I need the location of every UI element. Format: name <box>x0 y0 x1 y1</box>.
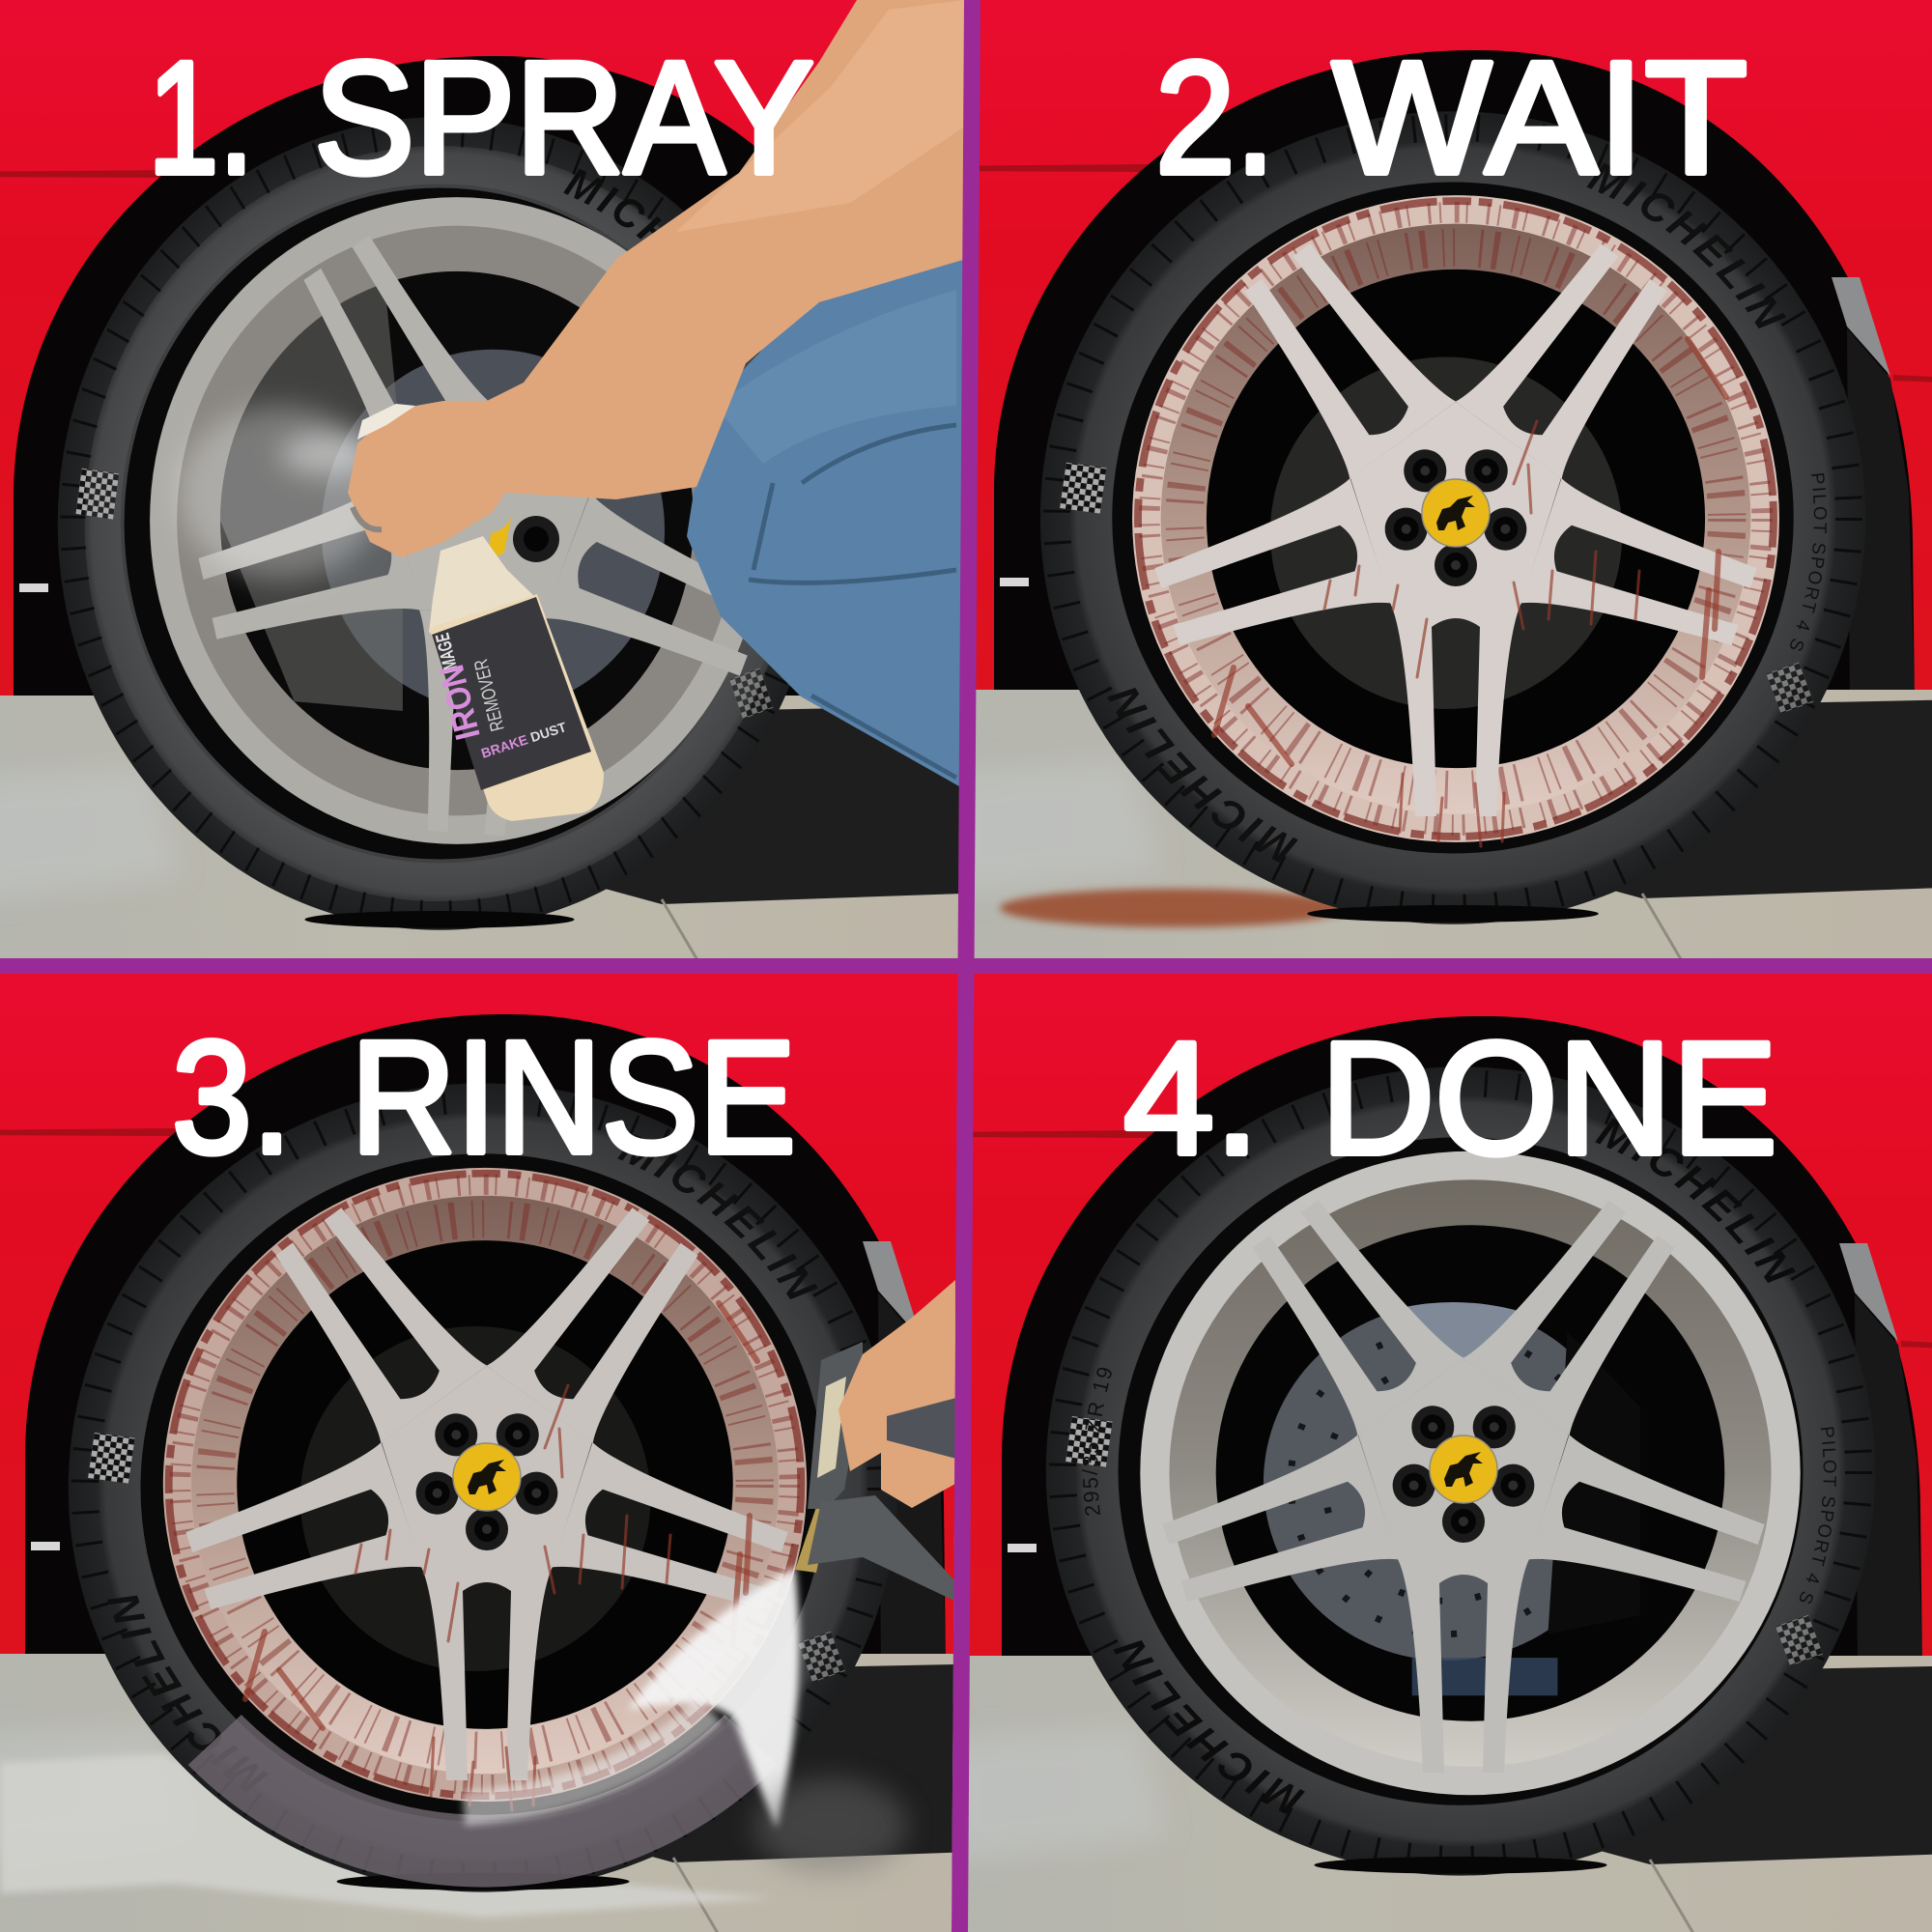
wheel: rust-stained rim <box>1132 195 1779 842</box>
wheel: foam-covered spokes <box>199 240 748 815</box>
car and ground background <box>0 0 990 995</box>
car and ground background <box>935 956 1932 1932</box>
car and ground background <box>0 954 1002 1932</box>
title: 3. RINSE: 3. <box>172 1009 292 1187</box>
wheel: rust-stained rim <box>163 1168 807 1802</box>
title: 2. WAIT <box>1155 29 1747 208</box>
product bottle: BRAKE DUST <box>479 719 569 761</box>
panel: step 1 spray <box>0 0 964 958</box>
title: 4. DONE: 4. <box>1123 1009 1260 1188</box>
yellow wheel badge peek <box>489 514 512 555</box>
product bottle: REMOVER <box>470 657 509 733</box>
pressure washer gun and hand <box>795 1280 956 1602</box>
bottle trigger head <box>357 404 415 440</box>
wheel: tire: 295/35 ZR 19 <box>1082 1368 1112 1516</box>
wheel: tire with wet sidewall: MICHELIN <box>563 168 662 240</box>
wheel: clean spokes with hub and badge <box>1154 1185 1773 1773</box>
title: 4. DONE: DONE <box>1321 1009 1777 1188</box>
title: 1. SPRAY: SPRAY <box>314 29 814 208</box>
wheel: foam-covered rim <box>150 197 764 844</box>
water jet <box>464 1567 908 1874</box>
wheel: tire <box>1040 111 1862 924</box>
wheel: tire: MICHELIN <box>1113 1640 1305 1814</box>
soapy runoff on ground <box>0 1753 773 1918</box>
bottle label text: IMAGE <box>432 631 463 675</box>
panel: step 2 wait <box>974 0 1932 958</box>
wheel: tire: PILOT SPORT 4 S <box>1800 1427 1836 1604</box>
wheel: tire: MICHELIN <box>1586 162 1786 328</box>
panel: step 4 done <box>968 974 1932 1932</box>
wheel: tire <box>68 1084 890 1892</box>
wheel: tire: MICHELIN <box>1107 688 1298 863</box>
title: 1. SPRAY: 1. <box>148 29 254 208</box>
wheel: tire with wet sidewall <box>58 118 790 930</box>
car and ground background <box>927 0 1932 989</box>
wheel: tire: MICHELIN <box>617 1134 818 1299</box>
soapy lower tire <box>214 1740 752 1851</box>
jeans knee <box>687 253 966 790</box>
wheel: tire: MICHELIN <box>1595 1119 1796 1283</box>
forearm and hand <box>348 0 966 557</box>
panel: step 3 rinse <box>0 974 958 1932</box>
title: 2. WAIT: WAIT <box>1332 29 1747 208</box>
product bottle: IRON <box>431 661 488 744</box>
wheel: tire: MICHELIN <box>107 1596 269 1781</box>
title: 4. DONE <box>1123 1009 1777 1188</box>
title: 3. RINSE <box>172 1009 796 1187</box>
spray mist <box>179 406 382 580</box>
product bottle <box>429 536 604 821</box>
wheel: spokes with hub and badge <box>178 1193 796 1810</box>
title: 2. WAIT: 2. <box>1155 29 1275 208</box>
wheel: tire: PILOT SPORT 4 S <box>1790 473 1828 651</box>
wheel: tire <box>1045 1066 1872 1876</box>
wheel: spokes with hub and badge <box>1147 229 1765 846</box>
rust puddle on ground <box>1000 889 1348 927</box>
title: 3. RINSE: RINSE <box>351 1009 796 1187</box>
wheel: clean rim <box>1140 1151 1801 1795</box>
wheel lug visible past wrist <box>513 516 559 562</box>
